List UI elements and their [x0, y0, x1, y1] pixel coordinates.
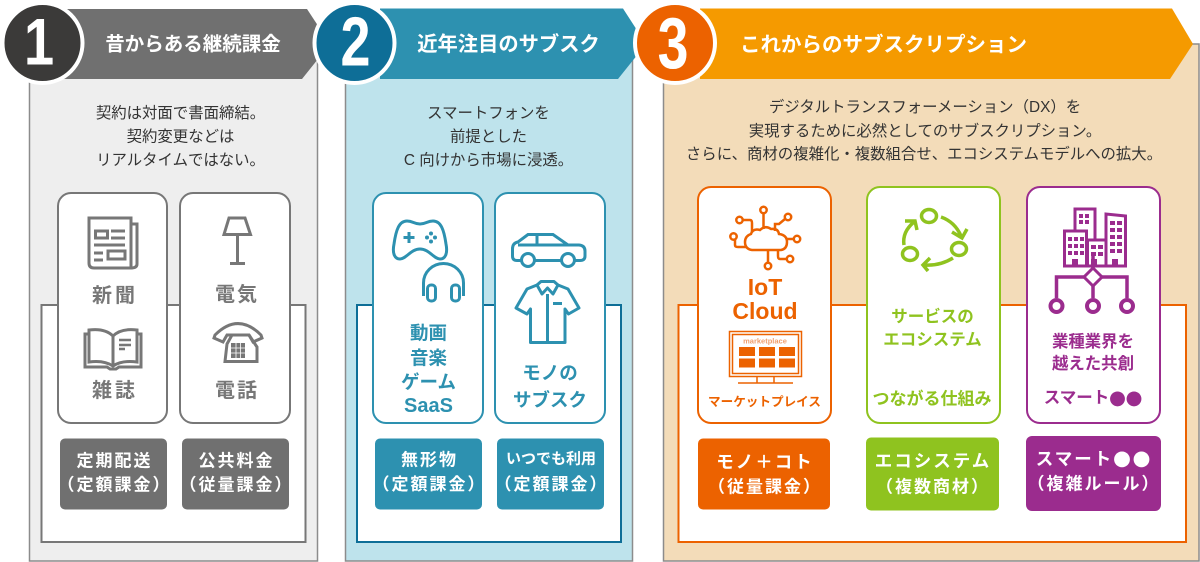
icon: newspaper: [89, 218, 137, 268]
description 2: スマートフォンを: [427, 104, 550, 122]
card: digital subscriptions: [373, 193, 483, 423]
heading 2: 近年注目のサブスク: [417, 32, 600, 56]
icon: marketplace monitor: [730, 332, 802, 383]
number badge 2: [314, 3, 394, 83]
icon: buildings and network: [1050, 209, 1133, 312]
icon: cycle: [902, 210, 967, 271]
button: use anytime: （定額課金）: [494, 474, 608, 494]
icon: marketplace monitor: marketplace: [743, 336, 787, 346]
panel 2 background: [346, 60, 632, 561]
button: intangible goods: （定額課金）: [372, 474, 486, 494]
icon: headphones: [424, 264, 464, 301]
button: ecosystem: エコシステム: [875, 451, 991, 471]
label: video music games SaaS: 動画: [410, 322, 447, 344]
button: use anytime: いつでも利用: [506, 450, 596, 468]
description 2: 前提とした: [450, 127, 527, 145]
button: intangible goods: 無形物: [401, 450, 458, 470]
label: smart: スマート●●: [1044, 386, 1142, 410]
card: cross-industry co-creation: [1027, 187, 1160, 423]
button: use anytime: [494, 438, 608, 510]
icon: game controller: [393, 221, 447, 259]
card: service ecosystem: [867, 187, 1000, 423]
panel: 3 future subscriptions: [635, 3, 1199, 561]
panel 2 inner box: [357, 305, 621, 542]
label: connected mechanism: つながる仕組み: [872, 388, 992, 408]
label: magazine: 雑誌: [92, 379, 138, 402]
panel: 2 recent subscriptions: [314, 3, 646, 561]
label: IoT Cloud: Cloud: [732, 298, 798, 324]
panel 3 background: [664, 44, 1199, 561]
panel 1 inner box: [42, 305, 306, 542]
button: smart complex rules: スマート●●: [1036, 446, 1152, 472]
button: ecosystem: [866, 438, 999, 510]
icon: telephone: [214, 324, 262, 362]
label: cross-industry co-creation: 業種業界を: [1052, 333, 1134, 351]
label: service ecosystem: サービスの: [891, 306, 974, 326]
label: video music games SaaS: ゲーム: [401, 372, 456, 392]
header arrow 3: [700, 8, 1193, 79]
button: regular delivery: 定期配送: [76, 452, 152, 470]
button: smart complex rules: （複雑ルール）: [1028, 474, 1160, 494]
label: subscription of goods: [513, 362, 587, 410]
button: regular delivery: [58, 438, 172, 510]
label: service ecosystem: [883, 306, 982, 349]
number badge 1: 1: [24, 4, 54, 79]
description 1: 契約変更などは: [127, 127, 234, 145]
button: ecosystem: （複数商材）: [876, 476, 990, 496]
description 3: 実現するために必然としてのサブスクリプション。: [749, 120, 1101, 140]
button: goods plus services: モノ＋コト: [716, 452, 814, 472]
card: subscription of goods: [495, 193, 605, 423]
panel 3 inner box: [678, 305, 1186, 542]
header arrow 1: [60, 9, 330, 79]
number badge 2: 2: [341, 3, 370, 81]
header arrow 2: [380, 8, 646, 79]
button: utility fee: （従量課金）: [180, 474, 294, 494]
label: marketplace: マーケットプレイス: [708, 395, 821, 409]
card: IoT cloud marketplace: [698, 187, 831, 423]
description 2: C 向けから市場に浸透。: [404, 150, 573, 168]
button: regular delivery: （定額課金）: [58, 474, 172, 494]
button: utility fee: [180, 438, 294, 510]
icon: open book: [85, 330, 141, 369]
description 3: デジタルトランスフォーメーション（DX）を: [769, 96, 1081, 116]
label: video music games SaaS: 音楽: [410, 348, 447, 368]
label: IoT Cloud: [732, 274, 798, 324]
button: smart complex rules: [1026, 436, 1161, 511]
number badge 1: [2, 3, 82, 83]
card: newspaper and magazine: [58, 193, 167, 423]
label: cross-industry co-creation: [1052, 333, 1134, 373]
description 3: さらに、商材の複雑化・複数組合せ、エコシステムモデルへの拡大。: [686, 144, 1162, 162]
icon: shirt: [516, 282, 579, 342]
panel 1 background: [30, 60, 318, 561]
label: subscription of goods: サブスク: [513, 390, 587, 410]
number badge 3: 3: [658, 3, 688, 84]
label: service ecosystem: エコシステム: [883, 331, 982, 349]
label: video music games SaaS: [401, 322, 456, 417]
button: goods plus services: （従量課金）: [708, 476, 822, 496]
number badge 3: [635, 3, 715, 84]
button: intangible goods: [372, 438, 486, 510]
heading 3: これからのサブスクリプション: [740, 32, 1027, 56]
label: cross-industry co-creation: 越えた共創: [1052, 355, 1134, 373]
label: electricity: 電気: [215, 283, 259, 306]
icon: car: [512, 234, 585, 266]
card: electricity and telephone: [180, 193, 290, 423]
description 1: 契約は対面で書面締結。: [96, 104, 265, 122]
label: video music games SaaS: SaaS: [404, 395, 453, 417]
icon: lamp: [224, 218, 250, 264]
heading 1: 昔からある継続課金: [105, 34, 281, 56]
icon: cloud network: [730, 207, 800, 269]
description 1: リアルタイムではない。: [96, 150, 265, 168]
label: IoT Cloud: IoT: [748, 274, 782, 300]
button: goods plus services: [698, 438, 830, 510]
label: newspaper: 新聞: [92, 284, 138, 307]
panel: 1 traditional recurring billing: [2, 3, 330, 561]
label: telephone: 電話: [215, 379, 259, 402]
label: subscription of goods: モノの: [522, 362, 578, 384]
button: utility fee: 公共料金: [198, 450, 274, 470]
